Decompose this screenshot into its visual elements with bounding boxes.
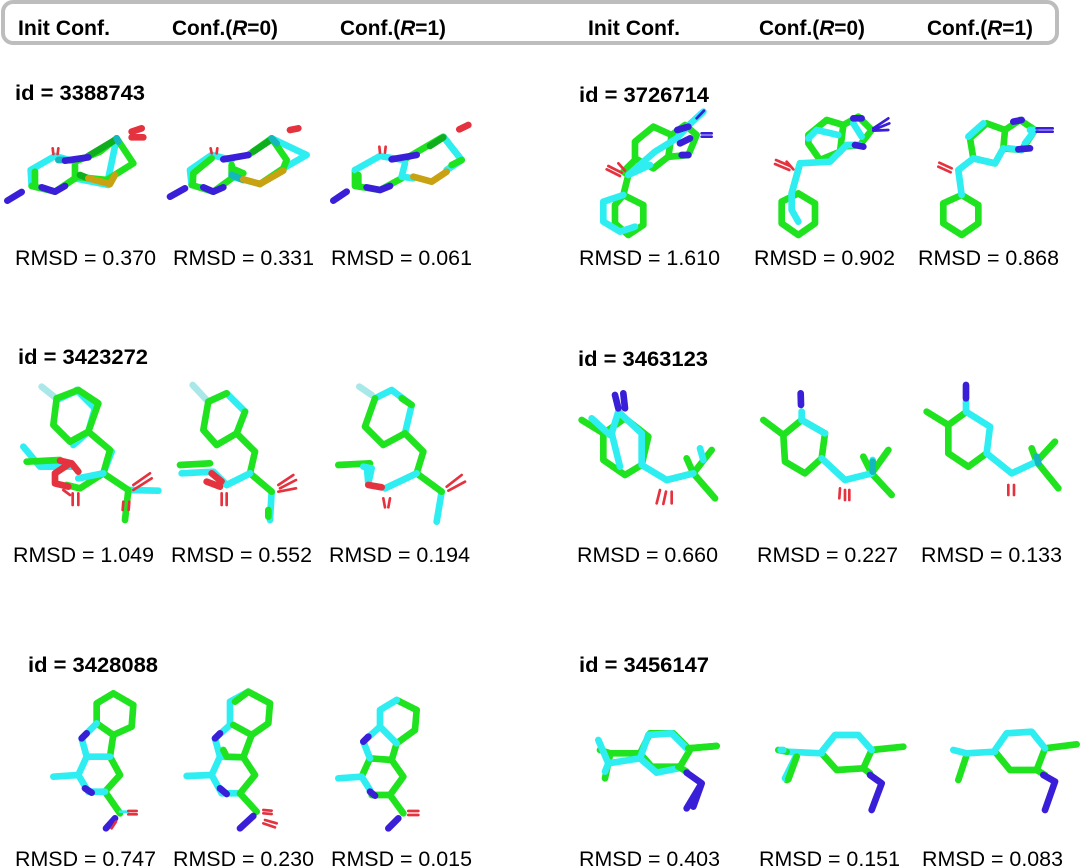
header bar: Conf.(R=0): [759, 17, 865, 40]
molecules: id 3463123: [582, 393, 715, 504]
RMSD values: id 3423272: RMSD = 0.194: [329, 543, 470, 567]
RMSD values: id 3456147: [579, 847, 1063, 867]
panel: id 3388743: [7, 82, 472, 270]
header bar: Init Conf.: [18, 17, 110, 40]
header bar: Conf.(R=1): [340, 17, 446, 40]
panel: id 3726714: [579, 84, 1059, 270]
RMSD values: id 3726714: RMSD = 0.902: [754, 246, 895, 270]
heading: id 3456147: id = 3456147: [579, 654, 709, 677]
RMSD values: id 3428088: [15, 847, 472, 867]
RMSD values: id 3463123: [577, 543, 1062, 567]
panel: id 3423272: [13, 346, 470, 567]
RMSD values: id 3423272: RMSD = 0.552: [171, 543, 312, 567]
header bar: Init Conf.: [588, 17, 680, 40]
panel: id 3456147: [579, 654, 1077, 867]
header bar: Conf.(R=0): [172, 17, 278, 40]
RMSD values: id 3388743: [15, 246, 472, 270]
RMSD values: id 3423272: RMSD = 1.049: [13, 543, 154, 567]
RMSD values: id 3388743: RMSD = 0.061: [331, 246, 472, 270]
RMSD values: id 3726714: RMSD = 0.868: [918, 246, 1059, 270]
header bar: [3, 2, 1057, 43]
panel: id 3463123: [577, 348, 1062, 567]
RMSD values: id 3463123: RMSD = 0.660: [577, 543, 718, 567]
RMSD values: id 3726714: RMSD = 1.610: [579, 246, 720, 270]
molecules: id 3726714: [603, 111, 712, 235]
RMSD values: id 3463123: RMSD = 0.133: [921, 543, 1062, 567]
RMSD values: id 3388743: RMSD = 0.370: [15, 246, 156, 270]
heading: id 3463123: id = 3463123: [578, 348, 708, 371]
panel: id 3428088: [15, 654, 472, 867]
molecules: id 3456147: [598, 733, 717, 808]
header bar: Conf.(R=1): [927, 17, 1033, 40]
heading: id 3428088: id = 3428088: [28, 654, 158, 677]
RMSD values: id 3388743: RMSD = 0.331: [173, 246, 314, 270]
RMSD values: id 3726714: [579, 246, 1059, 270]
RMSD values: id 3463123: RMSD = 0.227: [757, 543, 898, 567]
molecules: id 3388743: [7, 128, 143, 201]
heading: id 3388743: id = 3388743: [15, 82, 145, 105]
heading: id 3423272: id = 3423272: [18, 346, 148, 369]
RMSD values: id 3423272: [13, 543, 470, 567]
molecules: id 3423272: [23, 387, 158, 520]
molecules: id 3428088: [53, 693, 137, 828]
heading: id 3726714: id = 3726714: [579, 84, 709, 107]
